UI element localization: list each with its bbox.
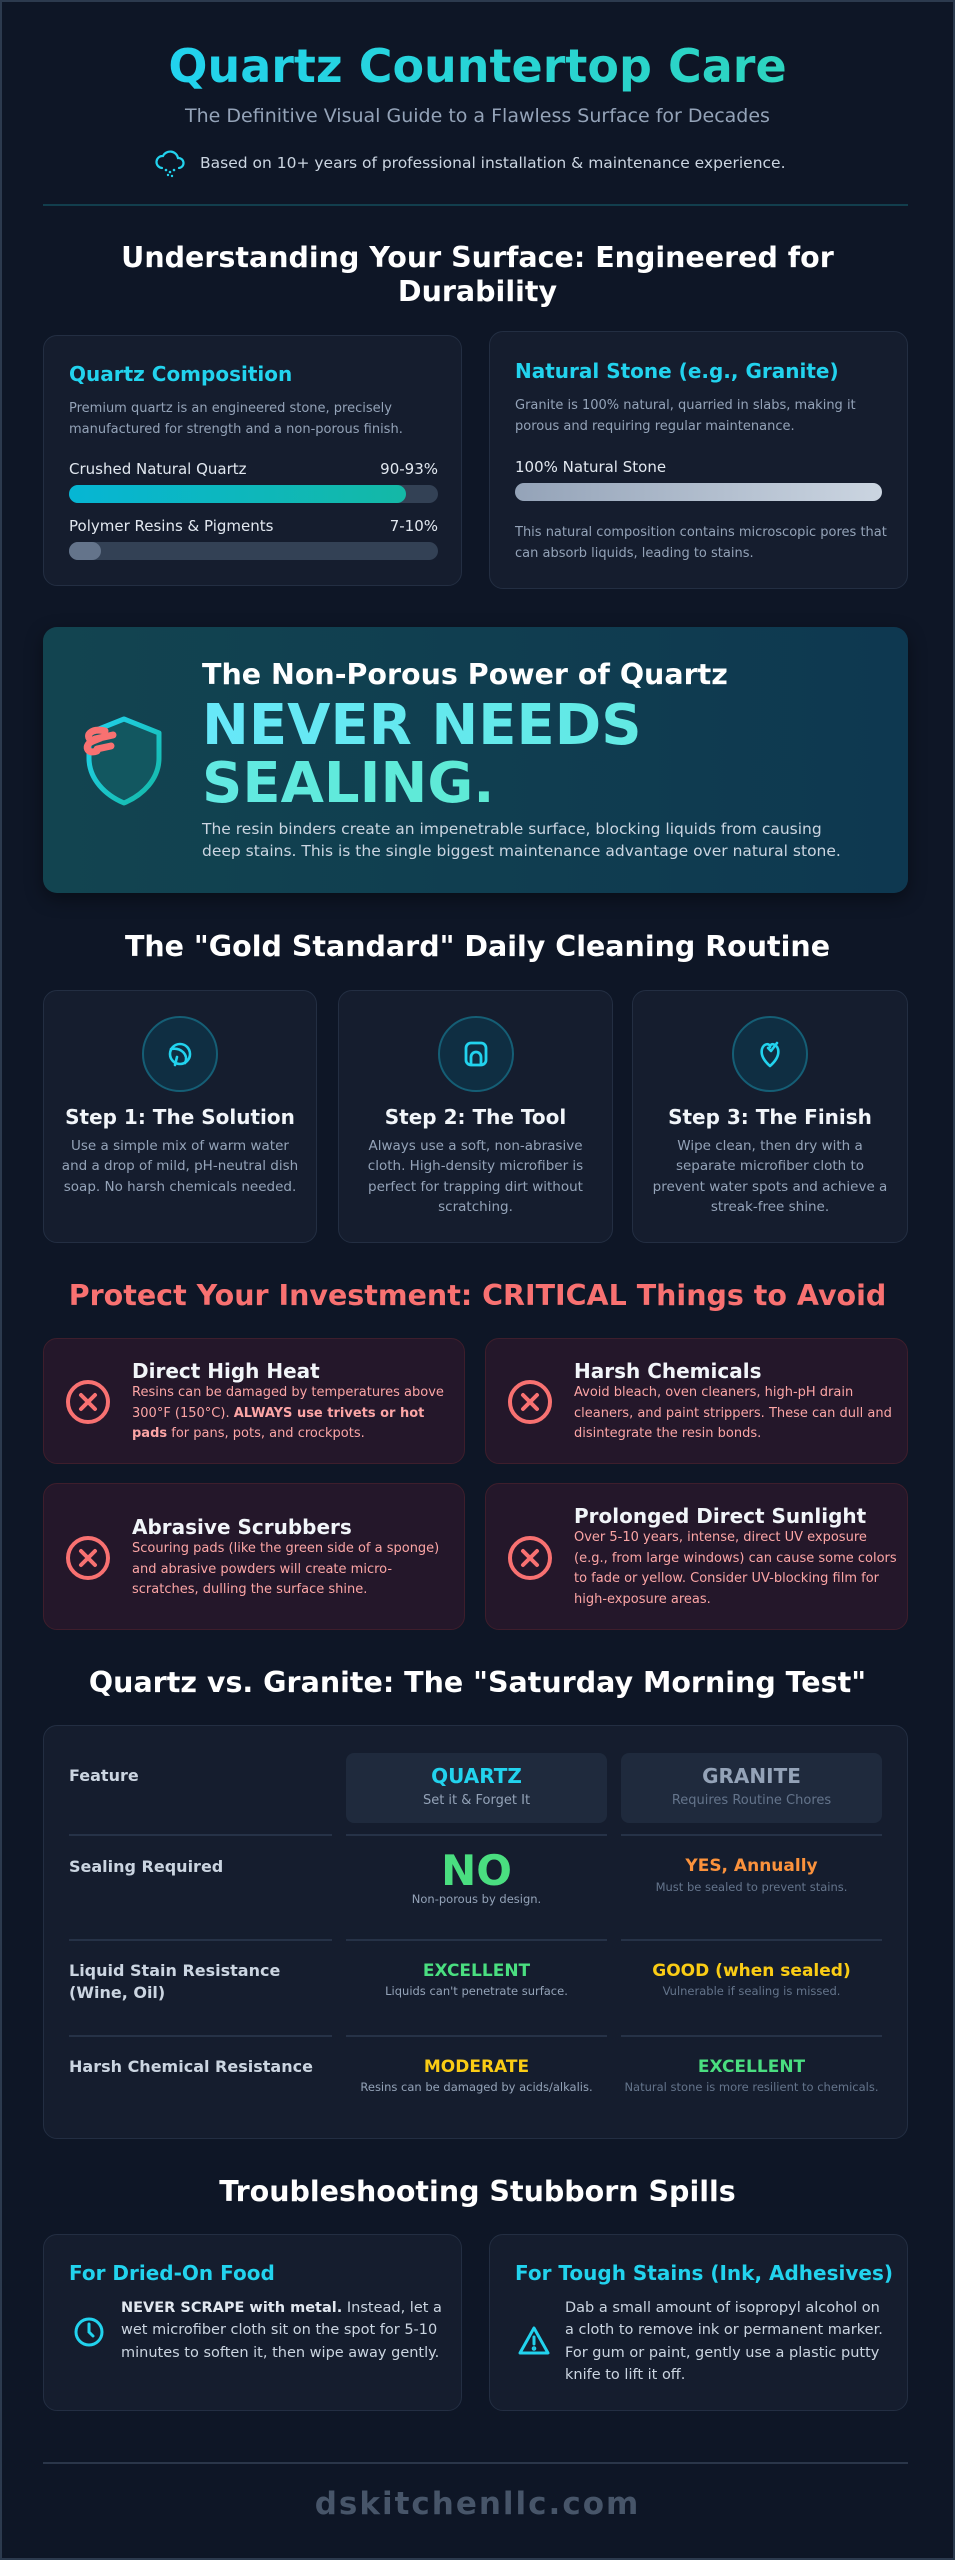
section heading: routine: The "Gold Standard" Daily Cleaning Routine [125, 930, 830, 963]
bar: crushed quartz: Crushed Natural Quartz [69, 460, 247, 478]
section heading: understanding: Understanding Your Surface: Engineered for [121, 241, 834, 274]
panel: harsh chemicals [485, 1338, 908, 1464]
row: liquid stain resistance [69, 1961, 851, 2002]
banner: never needs sealing [43, 627, 908, 893]
step text: and a drop of mild, pH-neutral dish [62, 1158, 298, 1174]
row: sealing required: YES, Annually [685, 1856, 818, 1876]
text: pads for pans, pots, and crockpots. [132, 1426, 365, 1441]
header: quartz [346, 1753, 607, 1823]
text: Resins can be damaged by temperatures above [132, 1385, 444, 1400]
header: granite: GRANITE [702, 1764, 801, 1788]
tagline text: Based on 10+ years of professional installation & maintenance experience. [200, 154, 786, 172]
step text: scratching. [438, 1199, 513, 1215]
icon: finish [732, 1016, 808, 1092]
row: liquid stain resistance: Liquids can't penetrate surface. [385, 1984, 568, 1998]
text: high-exposure areas. [574, 1592, 711, 1607]
text: minutes to soften it, then wipe away gently. [121, 2345, 439, 2361]
row: harsh chemical resistance: MODERATE [424, 2057, 529, 2077]
description [69, 401, 403, 436]
banner text [202, 820, 841, 860]
step text [653, 1138, 887, 1215]
banner headline: SEALING. [202, 751, 495, 816]
bar: polymer resins: Polymer Resins & Pigments [69, 517, 273, 535]
text: scratches, dulling the surface shine. [132, 1582, 367, 1597]
text [574, 1385, 892, 1441]
panel: tough stains [489, 2234, 908, 2411]
panel: step 2 [338, 990, 613, 1243]
step text: streak-free shine. [711, 1199, 829, 1215]
icon: x [66, 1536, 110, 1580]
footer: website: dskitchenllc.com [315, 2486, 640, 2522]
step text: perfect for trapping dirt without [368, 1179, 583, 1195]
description [515, 398, 856, 434]
text: wet microfiber cloth sit on the spot for 5-10 [121, 2322, 437, 2338]
comparison table [43, 1725, 908, 2139]
row: harsh chemical resistance [69, 2057, 879, 2094]
title: Harsh Chemicals [574, 1359, 762, 1383]
icon: tool [438, 1016, 514, 1092]
bar: natural stone: 100% Natural Stone [515, 458, 666, 476]
row: harsh chemical resistance: Natural stone is more resilient to chemicals. [624, 2080, 879, 2094]
row: liquid stain resistance: GOOD (when sealed) [652, 1961, 851, 1981]
text: (e.g., from large windows) can cause some colors [574, 1551, 897, 1566]
step title: Step 2: The Tool [385, 1105, 566, 1129]
text [132, 1541, 439, 1597]
text: and abrasive powders will create micro- [132, 1562, 392, 1577]
text: NEVER SCRAPE with metal. Instead, let a [121, 2300, 442, 2316]
note [514, 525, 887, 560]
bar: polymer resins [69, 517, 438, 560]
bar: polymer resins: 7-10% [390, 517, 438, 535]
title: Abrasive Scrubbers [132, 1515, 352, 1539]
step title: Step 1: The Solution [65, 1105, 295, 1129]
text [132, 1385, 444, 1441]
row: liquid stain resistance: Vulnerable if sealing is missed. [663, 1984, 840, 1998]
step text [62, 1138, 298, 1195]
text [574, 1530, 897, 1607]
text [121, 2300, 442, 2361]
text: a cloth to remove ink or permanent marker. [565, 2322, 883, 2338]
text: Avoid bleach, oven cleaners, high-pH drain [574, 1385, 853, 1400]
row: harsh chemical resistance: Harsh Chemical Resistance [69, 2057, 313, 2076]
step text: cloth. High-density microfiber is [368, 1158, 583, 1174]
icon: clock [74, 2318, 104, 2346]
description: Granite is 100% natural, quarried in slabs, making it [515, 398, 856, 413]
panel: step 3 [632, 990, 908, 1243]
icon: x [508, 1536, 552, 1580]
text: 300°F (150°C). ALWAYS use trivets or hot [132, 1406, 424, 1421]
text: Dab a small amount of isopropyl alcohol on [565, 2300, 880, 2316]
row: liquid stain resistance: Liquid Stain Resistance [69, 1961, 280, 1980]
panel: direct high heat [43, 1338, 465, 1464]
panel: step 1 [43, 990, 317, 1243]
text: Scouring pads (like the green side of a sponge) [132, 1541, 439, 1556]
text: disintegrate the resin bonds. [574, 1426, 761, 1441]
step text: Always use a soft, non-abrasive [368, 1138, 583, 1154]
step title: Step 3: The Finish [668, 1105, 872, 1129]
description: manufactured for strength and a non-porous finish. [69, 422, 403, 436]
icon: x [66, 1380, 110, 1424]
row: sealing required: Non-porous by design. [412, 1892, 541, 1906]
icon: solution [142, 1016, 218, 1092]
heading: Natural Stone (e.g., Granite) [515, 359, 839, 383]
title: Prolonged Direct Sunlight [574, 1504, 866, 1528]
panel: dried-on food [43, 2234, 462, 2411]
icon: x [508, 1380, 552, 1424]
panel: natural stone [489, 331, 908, 589]
bar: natural stone [515, 458, 882, 501]
bar: crushed quartz [69, 460, 438, 503]
text [565, 2300, 883, 2383]
banner text: deep stains. This is the single biggest maintenance advantage over natural stone. [202, 842, 841, 860]
header: granite: Requires Routine Chores [672, 1793, 831, 1808]
step text: soap. No harsh chemicals needed. [64, 1179, 296, 1195]
text: For gum or paint, gently use a plastic putty [565, 2345, 879, 2361]
step text [368, 1138, 583, 1215]
row: harsh chemical resistance: EXCELLENT [698, 2057, 805, 2077]
row: sealing required: Sealing Required [69, 1857, 223, 1876]
banner heading: The Non-Porous Power of Quartz [202, 658, 728, 691]
section heading: understanding [121, 241, 834, 308]
row: liquid stain resistance: (Wine, Oil) [69, 1983, 165, 2002]
header: quartz: QUARTZ [431, 1764, 522, 1788]
note: can absorb liquids, leading to stains. [515, 546, 754, 560]
panel: abrasive scrubbers [43, 1483, 465, 1630]
panel: sunlight [485, 1483, 908, 1630]
panel: quartz composition [43, 335, 462, 586]
heading: For Dried-On Food [69, 2261, 275, 2285]
text: Over 5-10 years, intense, direct UV exposure [574, 1530, 867, 1545]
bar: crushed quartz: 90-93% [380, 460, 438, 478]
section heading: avoid: Protect Your Investment: CRITICAL Things to Avoid [69, 1279, 886, 1312]
title: Direct High Heat [132, 1359, 320, 1383]
tagline with icon [155, 150, 786, 178]
section heading: understanding: Durability [398, 275, 557, 308]
banner headline [202, 693, 642, 816]
header: granite [621, 1753, 882, 1823]
subtitle: The Definitive Visual Guide to a Flawless Surface for Decades [185, 105, 770, 127]
heading: For Tough Stains (Ink, Adhesives) [515, 2261, 893, 2285]
row: sealing required [69, 1846, 847, 1906]
row: sealing required: NO [441, 1846, 512, 1895]
icon: cloud [155, 150, 185, 178]
text: cleaners, and paint strippers. These can dull and [574, 1406, 892, 1421]
icon: shield [84, 716, 162, 806]
step text: Wipe clean, then dry with a [677, 1138, 863, 1154]
banner text: The resin binders create an impenetrable surface, blocking liquids from causing [202, 820, 822, 838]
step text: prevent water spots and achieve a [653, 1179, 887, 1195]
description: porous and requiring regular maintenance. [515, 418, 795, 434]
row: sealing required: Must be sealed to prevent stains. [656, 1880, 847, 1894]
step text: Use a simple mix of warm water [71, 1138, 289, 1154]
section heading: comparison: Quartz vs. Granite: The "Saturday Morning Test" [89, 1666, 866, 1699]
section heading: troubleshooting: Troubleshooting Stubborn Spills [219, 2175, 736, 2208]
text: to fade or yellow. Consider UV-blocking film for [574, 1571, 879, 1586]
row: liquid stain resistance: EXCELLENT [423, 1961, 530, 1981]
step text: separate microfiber cloth to [676, 1158, 864, 1174]
header: feature: Feature [69, 1766, 139, 1785]
header: quartz: Set it & Forget It [423, 1793, 530, 1808]
note: This natural composition contains microscopic pores that [515, 525, 887, 540]
description: Premium quartz is an engineered stone, precisely [69, 401, 392, 416]
icon: warning [518, 2326, 550, 2354]
banner headline: NEVER NEEDS [202, 693, 642, 758]
heading: Quartz Composition [69, 362, 292, 386]
text: knife to lift it off. [565, 2367, 685, 2383]
row: harsh chemical resistance: Resins can be damaged by acids/alkalis. [360, 2080, 593, 2094]
title: Quartz Countertop Care [168, 39, 787, 93]
